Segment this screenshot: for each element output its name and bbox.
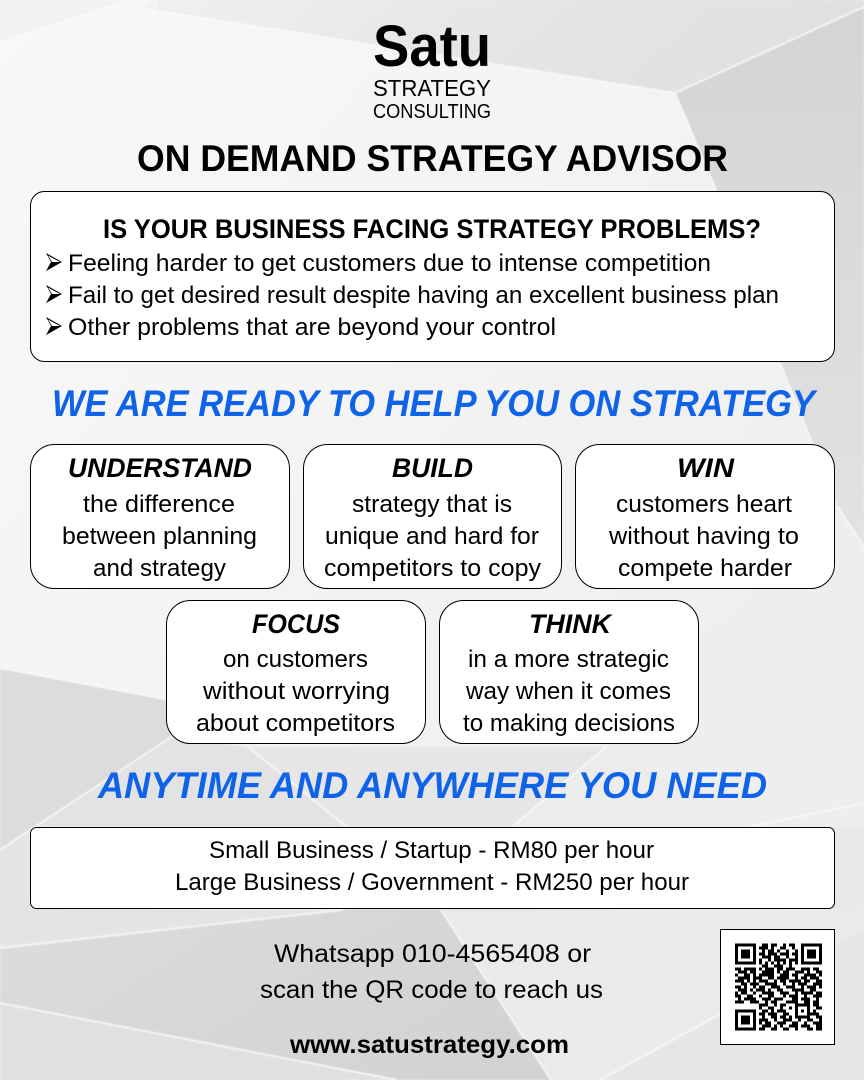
card: think: [440, 600, 698, 744]
card: focus: about competitors: [196, 710, 395, 737]
contact text: [260, 940, 603, 1004]
bullet 1: Feeling harder to get customers due to intense competition: [68, 250, 711, 277]
panel: pricing: Large Business / Government - RM250 per hour: [175, 869, 689, 896]
card: focus: [166, 600, 426, 744]
website: www.satustrategy.com: [289, 1031, 569, 1059]
card: think: way when it comes: [465, 678, 671, 705]
logo: Satu Strategy Consulting: CONSULTING: [373, 101, 491, 123]
card: build: strategy that is: [352, 491, 512, 518]
card: win: WIN: [677, 453, 735, 483]
heading: ready to help: WE ARE READY TO HELP YOU ON STRATEGY: [52, 383, 818, 424]
card: win: customers heart: [616, 491, 792, 518]
card: build: BUILD: [392, 453, 473, 483]
card: win: [576, 444, 834, 588]
card: focus: without worrying: [202, 678, 390, 705]
icon: QR code: [720, 930, 834, 1044]
title: ON DEMAND STRATEGY ADVISOR: [137, 138, 728, 179]
bullet 2: Fail to get desired result despite having an excellent business plan: [68, 282, 779, 309]
card: win: compete harder: [618, 555, 792, 582]
logo: Satu Strategy Consulting: Satu: [373, 14, 491, 79]
card: understand: [30, 444, 290, 588]
card: build: competitors to copy: [324, 555, 541, 582]
card: focus: FOCUS: [252, 609, 340, 639]
bullet 3: Other problems that are beyond your control: [68, 314, 556, 341]
contact text: Whatsapp 010-4565408 or: [274, 940, 591, 968]
card: build: [304, 444, 562, 588]
card: think: in a more strategic: [468, 646, 669, 673]
card: understand: UNDERSTAND: [68, 453, 252, 483]
logo: Satu Strategy Consulting: STRATEGY: [373, 75, 491, 101]
card: understand: and strategy: [93, 555, 226, 582]
card: build: unique and hard for: [325, 523, 539, 550]
contact text: scan the QR code to reach us: [260, 976, 603, 1004]
logo: Satu Strategy Consulting: [373, 14, 491, 123]
card: understand: between planning: [62, 523, 257, 550]
panel: strategy problems: [30, 192, 834, 362]
card: think: to making decisions: [463, 710, 675, 737]
card: understand: the difference: [83, 491, 235, 518]
heading: anytime and anywhere: ANYTIME AND ANYWHERE YOU NEED: [97, 765, 767, 806]
panel: pricing: Small Business / Startup - RM80 per hour: [209, 837, 654, 864]
card: think: THINK: [529, 609, 613, 639]
panel: pricing: [30, 828, 834, 908]
panel heading: IS YOUR BUSINESS FACING STRATEGY PROBLEMS?: [103, 214, 761, 244]
card: win: without having to: [608, 523, 799, 550]
card: focus: on customers: [223, 646, 368, 673]
